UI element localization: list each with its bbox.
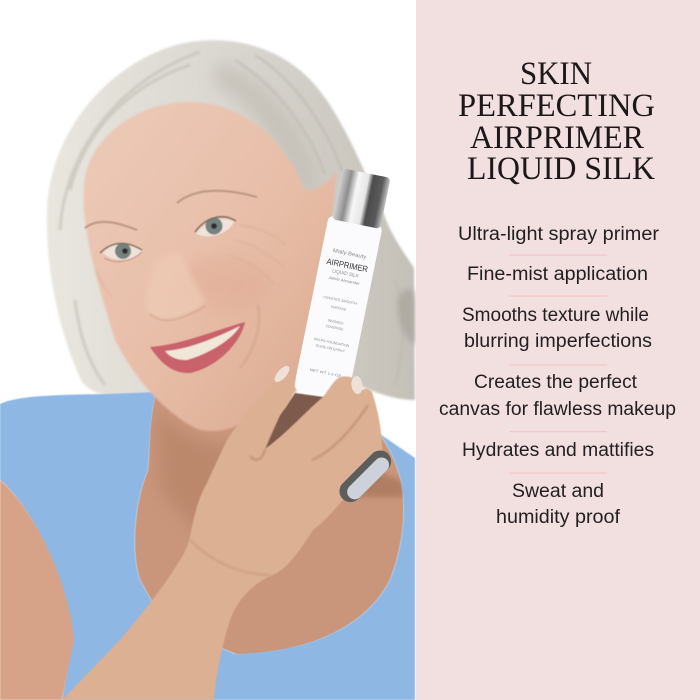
- eye area wrinkles: [96, 225, 285, 296]
- benefit: smooths texture: Smooths texture while: [462, 305, 649, 326]
- benefit: ultra-light: Ultra-light spray primer: [458, 224, 660, 245]
- benefit: sweat proof: [496, 481, 621, 528]
- benefit: smooths texture: [462, 305, 652, 352]
- title: PERFECTING: [458, 88, 655, 124]
- bottle label: LIQUID SILK: [332, 268, 360, 280]
- bottle label: INVISIBLE: [327, 318, 345, 326]
- chest crease shadow: [350, 470, 404, 497]
- bottle label: [304, 247, 371, 379]
- benefit: hydrates: Hydrates and mattifies: [462, 440, 654, 461]
- eye left: [85, 222, 142, 262]
- bottle label: AIRPRIMER: [326, 256, 369, 274]
- nose: [146, 250, 206, 320]
- bottle: [294, 167, 392, 400]
- title: [458, 56, 655, 187]
- title: LIQUID SILK: [467, 151, 655, 187]
- hair lock right: [398, 289, 415, 345]
- bottle label: NET WT 1.5 OZ: [309, 368, 342, 378]
- bottle label: COVERAGE: [325, 324, 344, 332]
- title: AIRPRIMER: [470, 120, 644, 156]
- hair: [47, 40, 415, 400]
- panel: product benefits: [416, 0, 700, 700]
- benefit: perfect canvas: canvas for flawless makeup: [439, 399, 676, 420]
- neck shadow: [155, 410, 285, 540]
- blue top: [0, 392, 415, 700]
- chest and neck: [135, 395, 404, 655]
- bottle label: GLIDE ON EASILY: [315, 343, 346, 353]
- benefit: perfect canvas: Creates the perfect: [474, 372, 638, 393]
- bottle shadow: [265, 393, 345, 450]
- bottle cap: [332, 168, 390, 229]
- bottle label: HELPS FOUNDATION: [313, 337, 350, 348]
- bottle label: Jamie Alexander: [328, 275, 361, 286]
- finger creases: [250, 405, 368, 460]
- benefit: perfect canvas: [439, 372, 676, 420]
- hair strands: [60, 52, 402, 385]
- bottle label: CREATES SMOOTH: [323, 295, 358, 306]
- benefit: sweat proof: humidity proof: [496, 507, 621, 528]
- nasolabial fold: [240, 305, 259, 368]
- face: [84, 102, 337, 431]
- fingernails: [272, 364, 364, 395]
- arm left: [0, 480, 74, 700]
- mouth: [150, 322, 245, 373]
- photo: woman holding primer bottle: [0, 40, 415, 700]
- hair strands shadow: [215, 62, 320, 200]
- ring: [335, 446, 396, 507]
- benefit: sweat proof: Sweat and: [512, 481, 604, 502]
- benefit: fine mist: Fine-mist application: [467, 264, 648, 285]
- hand and forearm: [62, 368, 382, 700]
- bottle label: Mally Beauty: [332, 248, 367, 261]
- benefit: smooths texture: blurring imperfections: [464, 331, 652, 352]
- eye right: [177, 191, 257, 236]
- wrist shading: [190, 540, 270, 575]
- bottle label: SURFACE: [330, 305, 347, 312]
- cheek blush: [180, 257, 270, 313]
- title: SKIN: [520, 56, 592, 92]
- bottle body: [294, 215, 383, 400]
